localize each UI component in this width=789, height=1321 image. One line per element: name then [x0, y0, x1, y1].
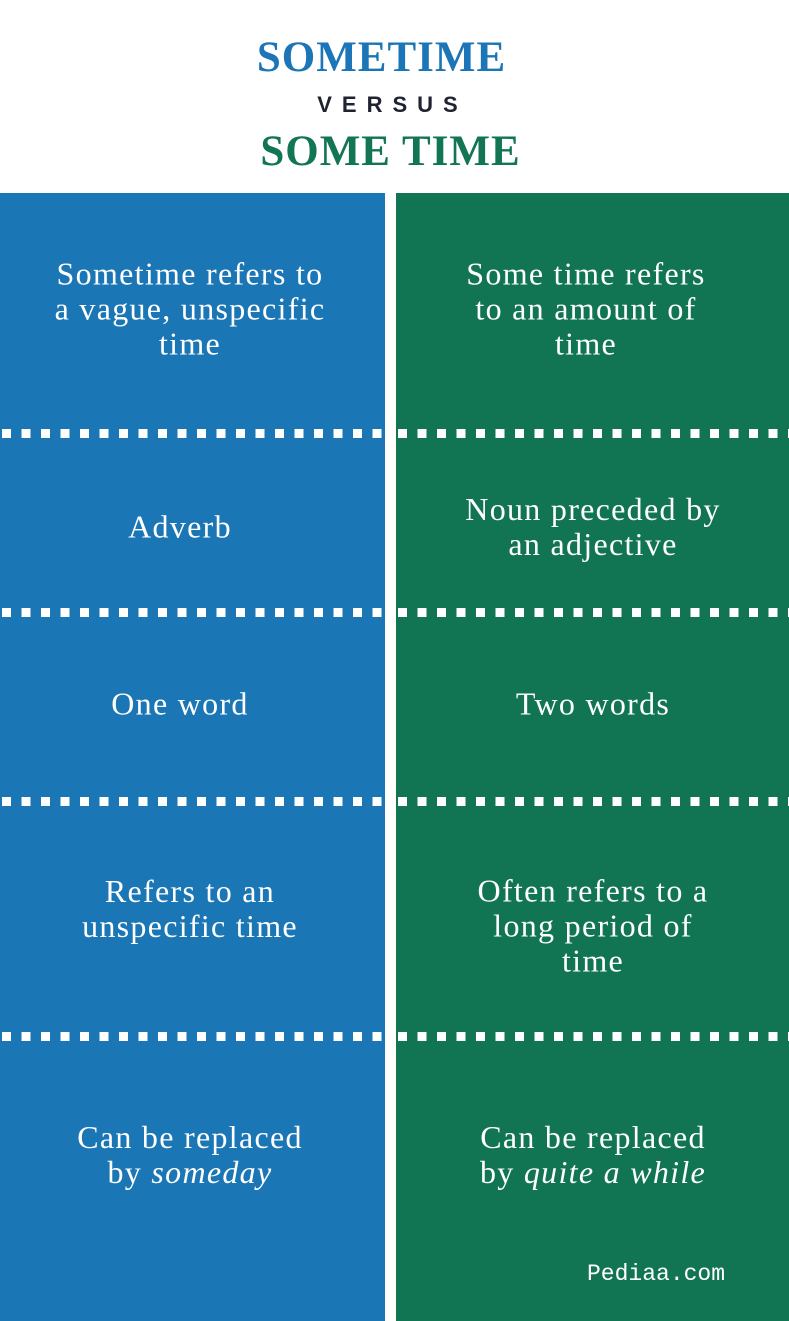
text: right row 1: to an amount of — [475, 290, 697, 326]
text: right row 4: Often refers to a — [478, 872, 708, 908]
text: left row 5 — [77, 1119, 303, 1190]
panel: some time column — [396, 193, 789, 1321]
text: left row 3: One word — [111, 686, 249, 722]
text: right row 4: time — [562, 942, 624, 978]
text: left row 5: Can be replaced — [77, 1119, 303, 1155]
text: right row 1: time — [555, 326, 617, 362]
text: right row 5 — [480, 1119, 706, 1190]
panel: sometime column — [0, 193, 385, 1321]
text: left row 5: by someday — [108, 1154, 272, 1190]
title: sometime: SOMETIME — [257, 34, 506, 81]
text: right row 1: Some time refers — [466, 256, 706, 292]
logo: pediaa.com: Pediaa.com — [587, 1261, 725, 1287]
text: left row 4: Refers to an — [105, 873, 275, 909]
text: right row 5: by quite a while — [480, 1154, 706, 1190]
text: left row 4: unspecific time — [82, 908, 298, 944]
text: right row 5: Can be replaced — [480, 1119, 706, 1155]
text: right row 2 — [465, 491, 721, 562]
text: left row 1: time — [159, 326, 221, 362]
text: right row 4: long period of — [493, 908, 693, 944]
title: versus: VERSUS — [317, 92, 468, 117]
text: left row 1: Sometime refers to — [57, 256, 323, 292]
text: left row 1 — [55, 256, 325, 362]
text: right row 4 — [478, 872, 708, 978]
text: right row 2: an adjective — [508, 526, 678, 562]
text: right row 2: Noun preceded by — [465, 491, 721, 527]
text: right row 1 — [466, 256, 706, 362]
text: left row 4 — [82, 873, 298, 944]
text: left row 1: a vague, unspecific — [55, 290, 325, 326]
title: some time: SOME TIME — [260, 128, 521, 175]
text: left row 2: Adverb — [128, 508, 232, 544]
title — [257, 34, 521, 175]
text: right row 3: Two words — [516, 686, 670, 722]
